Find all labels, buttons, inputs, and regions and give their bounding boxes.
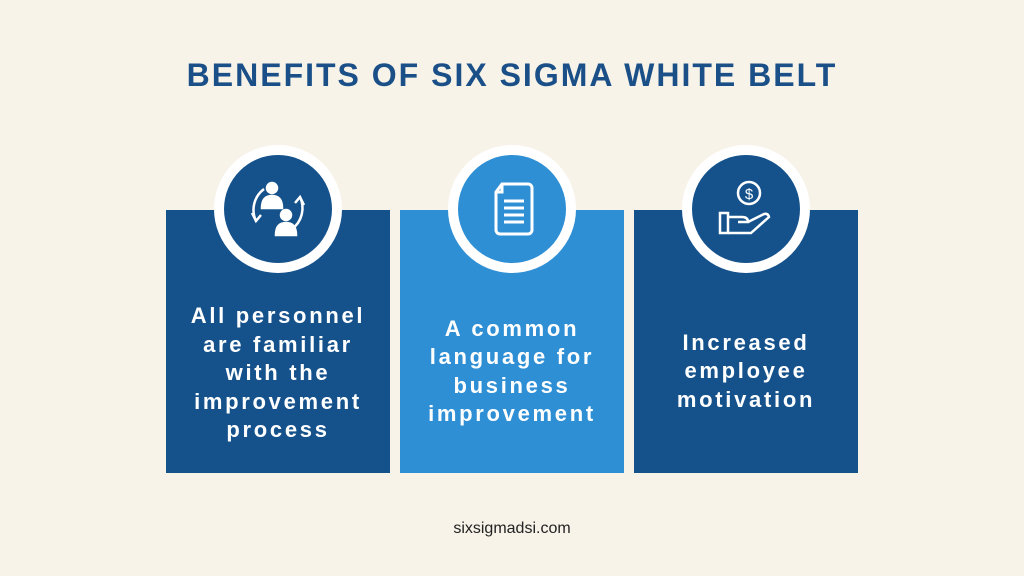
text: motivation: Increased bbox=[682, 330, 810, 355]
text: personnel: process bbox=[226, 417, 330, 442]
icon: people cycle bbox=[214, 145, 342, 273]
text: personnel: All personnel bbox=[191, 303, 365, 328]
footer: sixsigmadsi.com bbox=[453, 520, 571, 537]
text: personnel bbox=[191, 303, 365, 442]
text: personnel: are familiar bbox=[203, 332, 353, 357]
text: common language: business bbox=[454, 372, 570, 398]
title: BENEFITS OF SIX SIGMA WHITE BELT bbox=[187, 57, 837, 93]
text: common language: A common bbox=[445, 316, 579, 340]
text: personnel: improvement bbox=[194, 389, 362, 414]
icon: hand with coin bbox=[682, 145, 810, 273]
text: personnel: with the bbox=[226, 360, 330, 385]
text: common language: improvement bbox=[428, 401, 596, 426]
panel: common language bbox=[400, 210, 624, 473]
panel: personnel bbox=[166, 210, 390, 473]
text: motivation: motivation bbox=[677, 387, 815, 412]
icon: hand with coin: $ bbox=[745, 186, 754, 203]
text: motivation: employee bbox=[684, 358, 808, 383]
text: common language: language for bbox=[430, 344, 594, 369]
icon: document bbox=[448, 145, 576, 273]
text: motivation bbox=[677, 330, 815, 412]
panel: motivation bbox=[634, 210, 858, 473]
text: common language bbox=[428, 316, 596, 426]
